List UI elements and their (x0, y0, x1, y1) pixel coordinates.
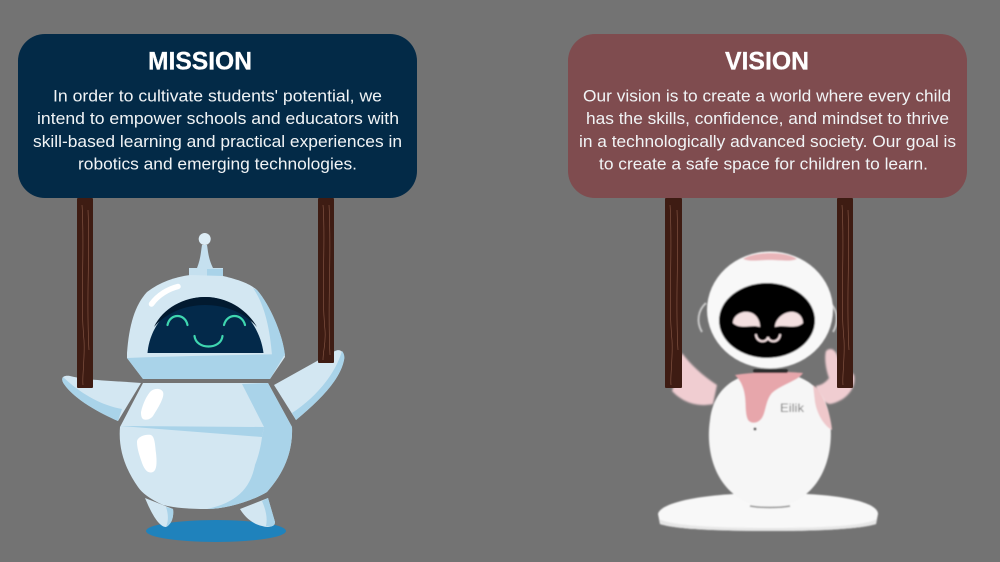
mission sign posts (77, 198, 334, 388)
left arm (672, 353, 717, 405)
brand label: Eilik (780, 401, 805, 415)
mission robot illustration (62, 233, 344, 542)
mission text: intend to empower schools and educators with (37, 109, 399, 128)
robot smile (168, 316, 245, 346)
body base shadow (750, 506, 790, 508)
mission text: skill-based learning and practical experiences in (33, 132, 402, 151)
vision sign posts (665, 198, 853, 388)
body (120, 383, 292, 509)
vision text: to create a safe space for children to learn. (599, 154, 928, 174)
neck (753, 369, 788, 373)
pink drip collar (735, 372, 803, 423)
head (127, 275, 285, 379)
right arm (274, 350, 344, 420)
head pink top (743, 253, 797, 261)
heading: mission: MISSION (148, 48, 252, 76)
vision text: has the skills, confidence, and mindset to thrive (586, 109, 949, 128)
right foot (240, 498, 275, 527)
vision text: in a technologically advanced society. Our goal is (579, 132, 956, 151)
vision text (579, 86, 956, 174)
robot screen (148, 297, 264, 353)
ear rings (699, 303, 706, 332)
mission text: In order to cultivate students' potential, we (53, 86, 382, 106)
left arm (62, 376, 141, 421)
mouth (756, 335, 780, 341)
vision text: Our vision is to create a world where every child (583, 86, 951, 106)
heading: vision: VISION (725, 48, 809, 76)
vision robot illustration (658, 252, 878, 531)
body side tint (813, 385, 832, 430)
head (707, 252, 833, 368)
face screen (719, 283, 815, 358)
left foot (145, 498, 173, 527)
body highlights (141, 389, 163, 420)
eyes (733, 312, 760, 327)
antenna (197, 245, 213, 268)
shadow under robot (146, 520, 286, 542)
mission text: robotics and emerging technologies. (78, 154, 357, 174)
mission text (33, 86, 402, 174)
body dot (754, 428, 756, 430)
panel: vision (568, 34, 967, 198)
base (658, 493, 878, 531)
right arm (816, 349, 854, 404)
head highlight (152, 286, 178, 304)
egg body (709, 372, 831, 507)
panel: mission (18, 34, 417, 198)
